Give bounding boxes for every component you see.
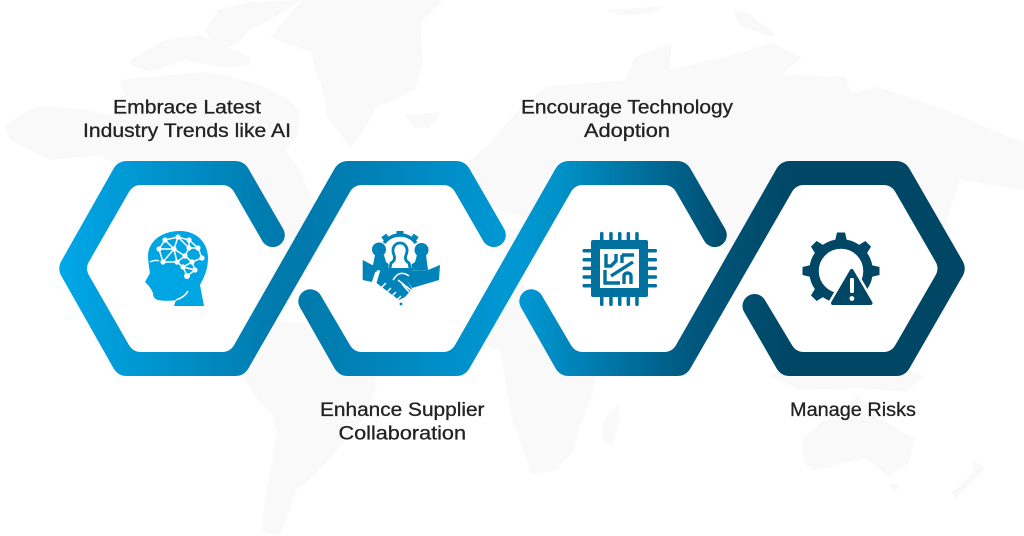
icon: supplier collaboration handshake bbox=[363, 231, 440, 305]
ribbon segment: hexagon 3 into hexagon 4 bbox=[519, 161, 965, 376]
icon: gear with warning triangle bbox=[802, 232, 880, 303]
label: Manage Risks: Manage Risks bbox=[790, 399, 916, 421]
icon: circuit chip bbox=[582, 232, 657, 306]
label: Encourage Technology Adoption bbox=[521, 96, 733, 142]
icon: AI brain head bbox=[145, 231, 208, 306]
label: Enhance Supplier Collaboration: Collaboration bbox=[338, 422, 466, 444]
hexagon white interiors bbox=[73, 173, 953, 364]
label: Embrace Latest Industry Trends like AI: Embrace Latest bbox=[113, 96, 262, 118]
label: Encourage Technology Adoption: Encourage Technology bbox=[521, 96, 733, 118]
ribbon segment: hexagon 1 into hexagon 2 bbox=[59, 161, 506, 376]
label: Embrace Latest Industry Trends like AI: Industry Trends like AI bbox=[83, 120, 291, 142]
label: Encourage Technology Adoption: Adoption bbox=[584, 120, 670, 142]
label: Enhance Supplier Collaboration: Enhance Supplier bbox=[320, 399, 485, 421]
label: Embrace Latest Industry Trends like AI bbox=[83, 96, 291, 142]
label: Enhance Supplier Collaboration bbox=[320, 399, 485, 444]
ribbon segment: hexagon 2 into hexagon 3 bbox=[298, 161, 727, 376]
